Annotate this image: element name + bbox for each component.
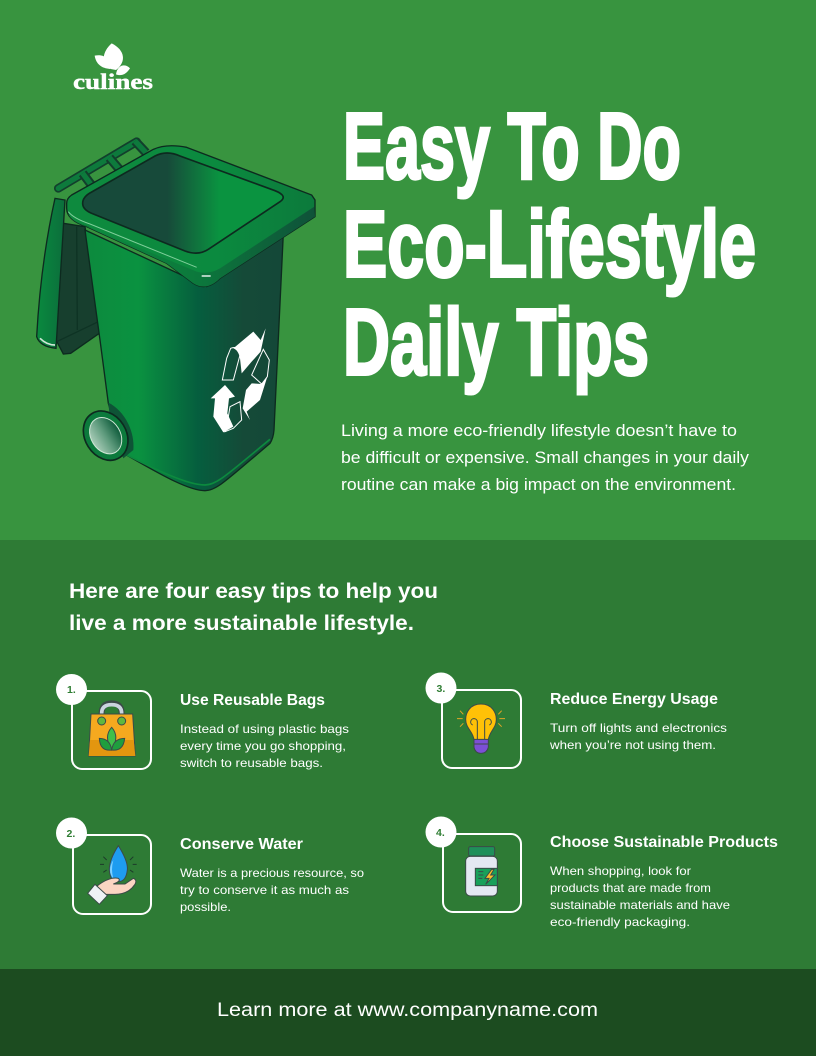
bin opening (83, 153, 283, 253)
hinge bar (58, 141, 146, 188)
rim (67, 146, 315, 287)
tip 1 body: Instead of using plastic bags (180, 722, 349, 736)
icon frame 3 (442, 690, 521, 768)
section heading (69, 579, 438, 635)
tip 2 body: Water is a precious resource, so (180, 866, 364, 880)
number badge 1 (56, 674, 87, 705)
intro text (341, 422, 750, 494)
tip 1 body (180, 722, 349, 770)
tip 1 body: switch to reusable bags. (180, 756, 323, 770)
title (343, 94, 756, 396)
icon frame 2 (73, 835, 151, 914)
logo: culines (73, 43, 154, 94)
bin body (85, 230, 283, 491)
tip 2 heading: Conserve Water (180, 836, 303, 853)
tip 2 body: try to conserve it as much as (180, 883, 349, 897)
tip 1 heading: Use Reusable Bags (180, 692, 325, 709)
tip 3 body: when you’re not using them. (549, 738, 716, 752)
tip 2: conserve water (56, 818, 364, 914)
logo wordmark: culines (73, 69, 154, 94)
bin base lip (125, 439, 270, 485)
icon frame 1 (72, 691, 151, 769)
tip 1: use reusable bags (56, 674, 349, 770)
tip 4 body: products that are made from (550, 881, 711, 895)
open lid, hanging (37, 198, 102, 354)
number badge 1: 1. (67, 684, 76, 696)
tip 3 heading: Reduce Energy Usage (550, 691, 718, 708)
tip 1 body: every time you go shopping, (180, 739, 346, 753)
tip 2 body: possible. (180, 900, 231, 914)
number badge 2 (56, 818, 87, 848)
tip 4 body: eco-friendly packaging. (550, 915, 690, 929)
panel: hero background (0, 0, 816, 540)
number badge 4: 4. (436, 827, 445, 839)
section heading: live a more sustainable lifestyle. (69, 611, 414, 635)
title: Daily Tips (343, 290, 649, 396)
footer band (0, 969, 816, 1056)
panel: tips background (0, 540, 816, 969)
wheel (74, 403, 137, 469)
icon: product bottle (466, 847, 497, 896)
number badge 4 (426, 816, 456, 848)
section heading: Here are four easy tips to help you (69, 579, 438, 603)
tip 4: choose sustainable products (426, 816, 778, 929)
tip 4 body: sustainable materials and have (550, 898, 730, 912)
number badge 3: 3. (436, 683, 445, 695)
intro text: Living a more eco-friendly lifestyle doesn’t have to (341, 422, 737, 440)
tip 2 body (180, 866, 364, 914)
tip 3: reduce energy usage (426, 672, 727, 768)
icon: shopping bag (89, 703, 135, 756)
icon: leaves (95, 43, 130, 75)
illustration: green recycling wheelie bin (37, 141, 315, 491)
icon: light bulb (457, 704, 505, 753)
intro text: be difficult or expensive. Small changes in your daily (341, 449, 750, 467)
icon frame 4 (443, 834, 521, 912)
tip 4 body: When shopping, look for (550, 864, 691, 878)
footer text: Learn more at www.companyname.com (217, 1000, 598, 1021)
icon: recycling arrows (211, 328, 269, 432)
tip 3 body: Turn off lights and electronics (550, 721, 727, 735)
number badge 3 (426, 672, 456, 704)
tip 3 body (549, 721, 727, 752)
number badge 2: 2. (66, 828, 75, 840)
tip 4 body (550, 864, 730, 929)
tip 4 heading: Choose Sustainable Products (550, 834, 778, 851)
intro text: routine can make a big impact on the environment. (341, 476, 736, 494)
icon: water drop over hand (88, 846, 137, 904)
